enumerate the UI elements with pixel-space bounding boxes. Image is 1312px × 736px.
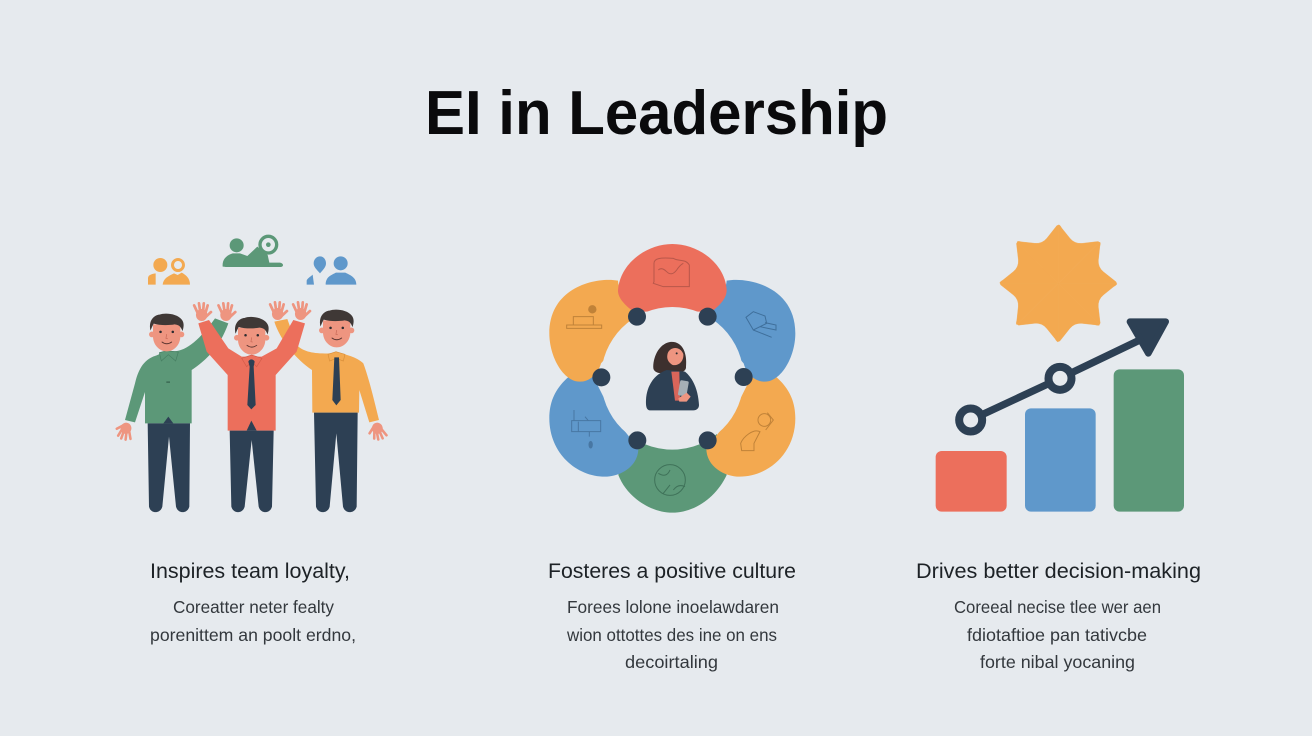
- heading: team loyalty: Inspires team loyalty,: [150, 560, 350, 583]
- petal: green bottom: [618, 433, 727, 513]
- figure: green shirt man: [115, 303, 235, 512]
- petal: blue bottom left: [549, 376, 638, 477]
- icon: sun: [988, 213, 1129, 354]
- icon: blue people: [307, 256, 356, 285]
- panel: positive culture flower diagram: [549, 244, 795, 513]
- icon: blue left petal sketch: [572, 410, 601, 448]
- petal: orange top left: [549, 280, 637, 382]
- petal: blue top right: [708, 280, 795, 382]
- icon: orange people: [148, 258, 190, 285]
- body text: team loyalty: porenittem an poolt erdno,: [150, 625, 356, 645]
- panel: better decisions chart: [936, 213, 1184, 512]
- connector dots: [592, 308, 753, 449]
- body text: better decisions: [954, 597, 1161, 672]
- body text: positive culture: [566, 597, 779, 672]
- body text: team loyalty: Coreatter neter fealty: [173, 597, 334, 617]
- figure: coral shirt man: [194, 302, 310, 512]
- icon: blue right petal sketch: [746, 312, 776, 337]
- body text: positive culture: wion ottottes des ine on ens: [566, 625, 777, 645]
- icon: orange right petal sketch: [741, 413, 773, 451]
- body text: positive culture: decoirtaling: [625, 652, 718, 672]
- inner circle: [601, 307, 744, 450]
- petal: red top: [618, 244, 727, 312]
- icon: green people with target: [223, 236, 283, 267]
- heading: positive culture: Fosteres a positive culture: [548, 560, 796, 583]
- body text: better decisions: fdiotaftioe pan tativcbe: [967, 625, 1147, 645]
- text block: column two: [548, 560, 796, 672]
- icon: red petal sketch: [653, 258, 689, 287]
- arrow: upward trend: [959, 322, 1166, 431]
- figure: yellow shirt man: [270, 302, 387, 512]
- heading: better decisions: Drives better decision-making: [916, 560, 1201, 583]
- body text: better decisions: Coreeal necise tlee wer aen: [954, 597, 1161, 617]
- icon: green petal globe: [655, 465, 685, 495]
- body text: better decisions: forte nibal yocaning: [980, 652, 1135, 672]
- icon: orange left petal sketch: [567, 306, 602, 328]
- petal: orange bottom right: [706, 376, 795, 477]
- panel: team loyalty illustration: [115, 236, 387, 512]
- body text: positive culture: Forees lolone inoelawdaren: [567, 597, 779, 617]
- text block: column three: [916, 560, 1201, 672]
- bar chart: [936, 369, 1184, 512]
- title: EI in Leadership: [425, 79, 888, 148]
- body text: team loyalty: [150, 597, 356, 645]
- figure: central leader woman: [646, 342, 699, 410]
- text block: column one: [150, 560, 356, 645]
